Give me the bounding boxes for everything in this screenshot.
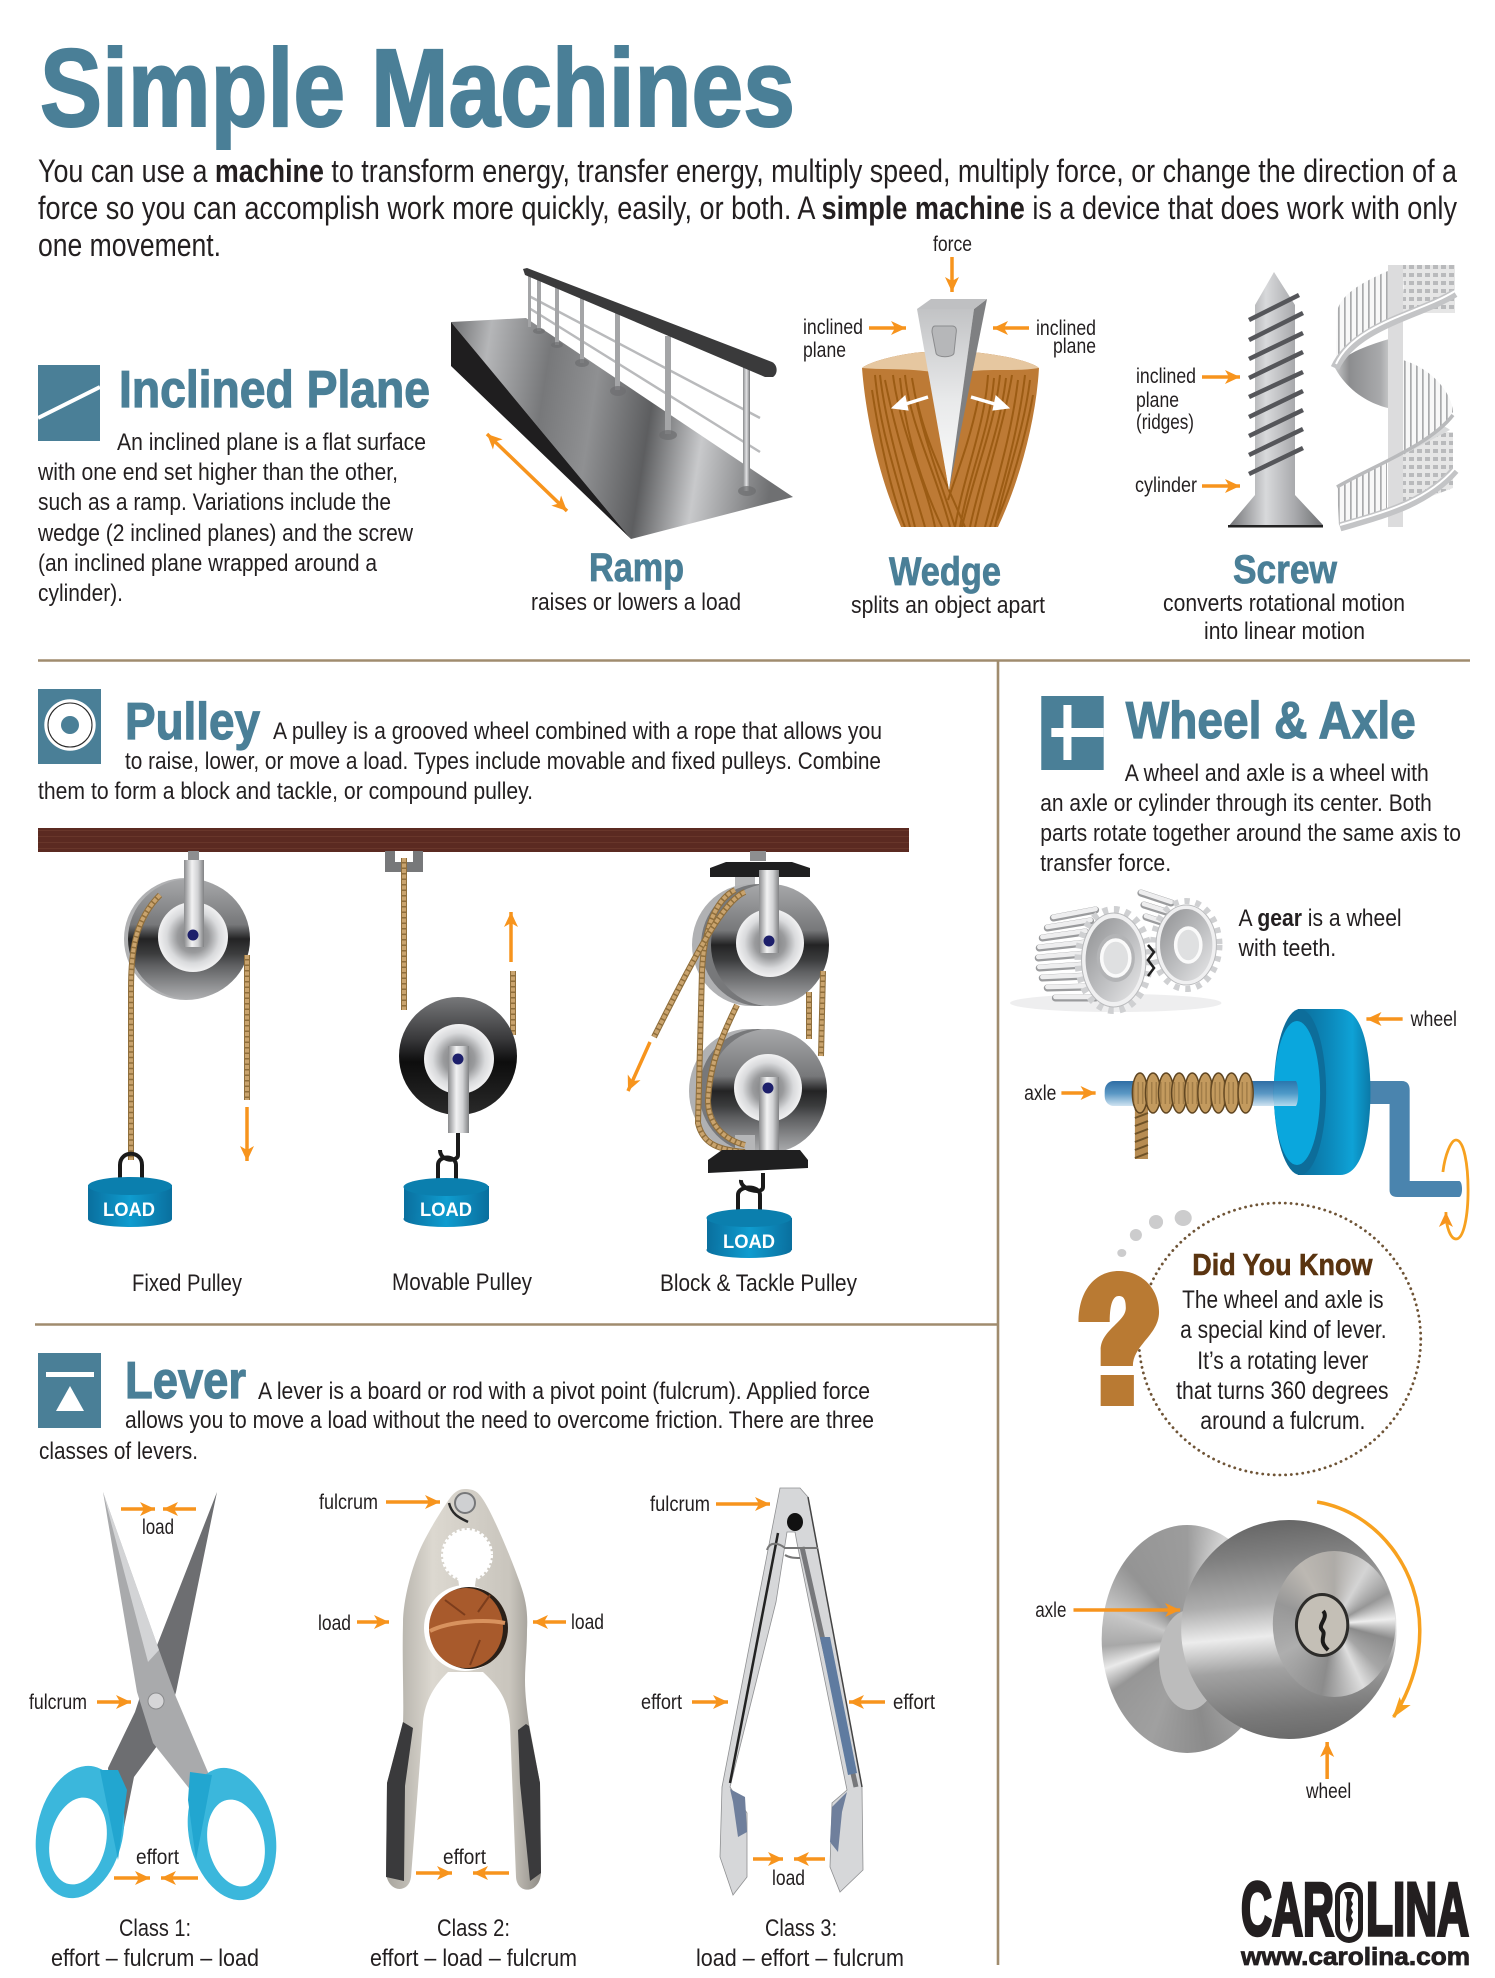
load weight: LOAD [420, 1200, 472, 1221]
scissors labels: fulcrum [29, 1691, 87, 1714]
arrow: ramp length [487, 434, 567, 511]
intro text: one movement. [38, 227, 221, 263]
gear note: A gear is a wheel [1239, 905, 1402, 932]
movable pulley [385, 851, 517, 1227]
tongs labels: load [772, 1867, 805, 1890]
ramp caption: Ramp [589, 546, 684, 590]
nutcracker labels: load [571, 1611, 604, 1634]
inclined plane description: (an inclined plane wrapped around a [38, 550, 378, 577]
arrows: split direction [892, 396, 1009, 410]
screw caption: Screw [1233, 548, 1338, 592]
arrow: pull down [245, 1107, 249, 1161]
caption: movable pulley: Movable Pulley [392, 1269, 532, 1296]
title: Simple Machines [40, 27, 795, 150]
pulley description: them to form a block and tackle, or compound pulley. [38, 778, 533, 805]
screw illustration [1228, 272, 1323, 528]
intro text [38, 153, 1457, 263]
lever description: classes of levers. [39, 1438, 198, 1465]
gear ridges [1038, 892, 1171, 998]
rear gear [1153, 901, 1219, 989]
icon: question mark [1079, 1271, 1159, 1406]
wedge labels: inclined [803, 316, 863, 339]
pulley description: A pulley is a grooved wheel combined with a rope that allows you [273, 718, 882, 745]
heading: pulley: Pulley [125, 693, 260, 751]
logo: carolina: O [1337, 1867, 1361, 1951]
tongs labels: effort [893, 1691, 935, 1714]
caption: class 1: effort – fulcrum – load [51, 1945, 259, 1972]
wedge labels [803, 233, 1096, 362]
wedge labels: force [933, 233, 972, 256]
inclined plane description: such as a ramp. Variations include the [38, 489, 391, 516]
lever description: allows you to move a load without the need to overcome friction. There are three [125, 1407, 874, 1434]
lever description: A lever is a board or rod with a pivot point (fulcrum). Applied force [258, 1378, 870, 1405]
heading: inclined plane: Inclined Plane [119, 361, 430, 419]
panel: inclined plane [37, 233, 1455, 645]
ceiling beam [38, 828, 909, 852]
logo: carolina [1240, 1867, 1470, 1971]
wheel and axle description: transfer force. [1040, 850, 1171, 877]
ramp caption: raises or lowers a load [531, 589, 741, 616]
screw labels: (ridges) [1136, 411, 1194, 434]
ramp caption [531, 546, 741, 616]
tongs image [720, 1488, 863, 1895]
screw labels: plane [1136, 389, 1179, 412]
inclined plane description: An inclined plane is a flat surface [117, 429, 426, 456]
wheel and axle illustration [1105, 1009, 1468, 1239]
screw caption: into linear motion [1204, 618, 1365, 645]
wheel and axle description: an axle or cylinder through its center. Both [1040, 790, 1432, 817]
icon: inclined plane [38, 365, 100, 441]
lever description [39, 1378, 874, 1465]
thought bubbles [1117, 1210, 1192, 1257]
scissors labels: load [142, 1516, 174, 1539]
caption: class 2: Class 2: [437, 1915, 510, 1942]
wheel and axle description: A wheel and axle is a wheel with [1125, 760, 1429, 787]
icon: lever [38, 1353, 101, 1428]
logo: carolina: CAR [1241, 1867, 1334, 1951]
caption: class 3: load – effort – fulcrum [696, 1945, 904, 1972]
logo: carolina: www.carolina.com [1240, 1943, 1470, 1971]
fixed pulley [88, 851, 250, 1227]
screw labels: inclined [1136, 365, 1196, 388]
scissors image [24, 1492, 288, 1908]
icon: pulley [38, 689, 101, 764]
wedge illustration [855, 299, 1045, 530]
pulley description [38, 718, 882, 805]
spiral staircase [1335, 265, 1455, 527]
nutcracker labels [318, 1491, 604, 1873]
load weight: LOAD [723, 1232, 775, 1253]
nutcracker labels: effort [443, 1846, 486, 1869]
block and tackle pulley [628, 851, 829, 1258]
inclined plane description [37, 429, 426, 607]
intro text: force so you can accomplish work more quickly, easily, or both. A simple machine is a device that does work with only [38, 190, 1457, 226]
caption: class 3 [696, 1915, 904, 1972]
scissor handles [24, 1758, 288, 1908]
callout text: around a fulcrum. [1200, 1407, 1365, 1435]
nutcracker labels: fulcrum [319, 1491, 378, 1514]
load weight [88, 1154, 172, 1227]
nutcracker labels: load [318, 1612, 351, 1635]
caption: class 1: Class 1: [119, 1915, 191, 1942]
pulley description: to raise, lower, or move a load. Types include movable and fixed pulleys. Combine [125, 748, 881, 775]
wedge caption: splits an object apart [851, 592, 1045, 619]
callout text: It’s a rotating lever [1197, 1347, 1368, 1375]
scissors labels [29, 1509, 198, 1878]
panel: wheel and axle [1010, 692, 1468, 1803]
load weight [706, 1173, 792, 1258]
heading: wheel and axle: Wheel & Axle [1126, 692, 1416, 750]
front gear [1078, 910, 1149, 1010]
wheel and axle labels: wheel [1410, 1008, 1457, 1031]
caption: class 3: Class 3: [765, 1915, 837, 1942]
wedge caption: Wedge [889, 550, 1001, 594]
wedge labels: plane [803, 339, 846, 362]
nutcracker image [386, 1489, 541, 1890]
callout text [1176, 1286, 1389, 1435]
wedge caption [851, 550, 1045, 619]
door knob labels and arrows [1035, 1502, 1420, 1803]
wedge labels: plane [1053, 335, 1096, 358]
arrow: pull rope [628, 1042, 650, 1091]
screw labels: cylinder [1135, 474, 1197, 497]
callout text: that turns 360 degrees [1176, 1377, 1389, 1405]
ramp illustration [451, 268, 793, 539]
did you know callout [1079, 1203, 1421, 1475]
caption: class 2 [370, 1915, 577, 1972]
gears image [1010, 892, 1221, 1012]
tongs labels: fulcrum [650, 1493, 710, 1516]
wheel and axle description [1040, 760, 1461, 877]
inclined plane description: wedge (2 inclined planes) and the screw [37, 520, 414, 547]
panel: pulley [38, 689, 909, 1297]
caption: block and tackle pulley: Block & Tackle Pulley [660, 1270, 857, 1297]
gear note [1238, 905, 1402, 962]
screw caption [1163, 548, 1405, 645]
inclined plane description: cylinder). [38, 580, 123, 607]
arrow: rotation [1443, 1140, 1468, 1239]
arrow: pull up [509, 912, 513, 962]
wheel and axle labels: axle [1024, 1082, 1056, 1105]
door knob image [1099, 1520, 1401, 1760]
door knob labels and arrows: axle [1035, 1599, 1066, 1622]
gear note: with teeth. [1238, 935, 1336, 962]
walnut [424, 1585, 508, 1671]
rope on axle [1132, 1073, 1254, 1159]
caption: class 1 [51, 1915, 259, 1972]
door knob labels and arrows: wheel [1305, 1780, 1351, 1803]
load weight: LOAD [103, 1200, 155, 1221]
screw caption: converts rotational motion [1163, 590, 1405, 617]
callout heading: Did You Know [1192, 1247, 1373, 1282]
tongs labels [641, 1493, 935, 1890]
load weight [404, 1133, 489, 1227]
inclined plane description: with one end set higher than the other, [37, 459, 398, 486]
caption: class 2: effort – load – fulcrum [370, 1945, 577, 1972]
screw labels [1135, 365, 1240, 497]
callout text: The wheel and axle is [1182, 1286, 1384, 1314]
icon: wheel and axle [1041, 696, 1104, 770]
wedge labels: inclined [1036, 317, 1096, 340]
tongs labels: effort [641, 1691, 682, 1714]
scissors labels: effort [136, 1846, 179, 1869]
callout text: a special kind of lever. [1180, 1316, 1387, 1344]
wheel and axle labels [1024, 1008, 1457, 1105]
panel: lever [24, 1352, 935, 1972]
caption: fixed pulley: Fixed Pulley [132, 1270, 242, 1297]
heading: lever: Lever [125, 1352, 246, 1410]
